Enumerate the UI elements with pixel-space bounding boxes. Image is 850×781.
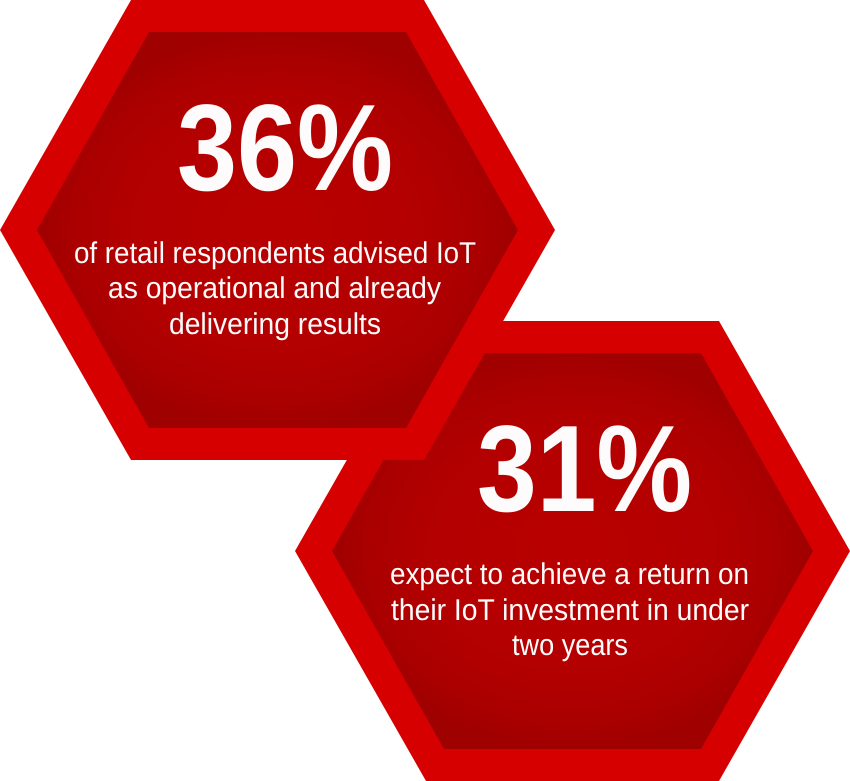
panel: 36% hexagon xyxy=(0,0,555,460)
description: return on investment: two years xyxy=(512,629,628,662)
hexagon outer border xyxy=(0,0,555,460)
description: retail respondents: as operational and already xyxy=(108,272,441,305)
panel: 31% hexagon xyxy=(295,321,850,781)
description: retail respondents xyxy=(74,237,476,341)
description: retail respondents: of retail respondents advised IoT xyxy=(74,237,476,270)
description: return on investment xyxy=(390,558,749,662)
statistic: 31%: 31% xyxy=(477,401,692,538)
description: return on investment: their IoT investment in under xyxy=(391,594,749,627)
hexagon inner fill xyxy=(332,353,813,749)
description: return on investment: expect to achieve a return on xyxy=(390,558,749,591)
statistic: 36%: 36% xyxy=(177,80,393,217)
description: retail respondents: delivering results xyxy=(169,308,381,341)
hexagon inner fill xyxy=(37,32,518,428)
hexagon outer border xyxy=(295,321,850,781)
